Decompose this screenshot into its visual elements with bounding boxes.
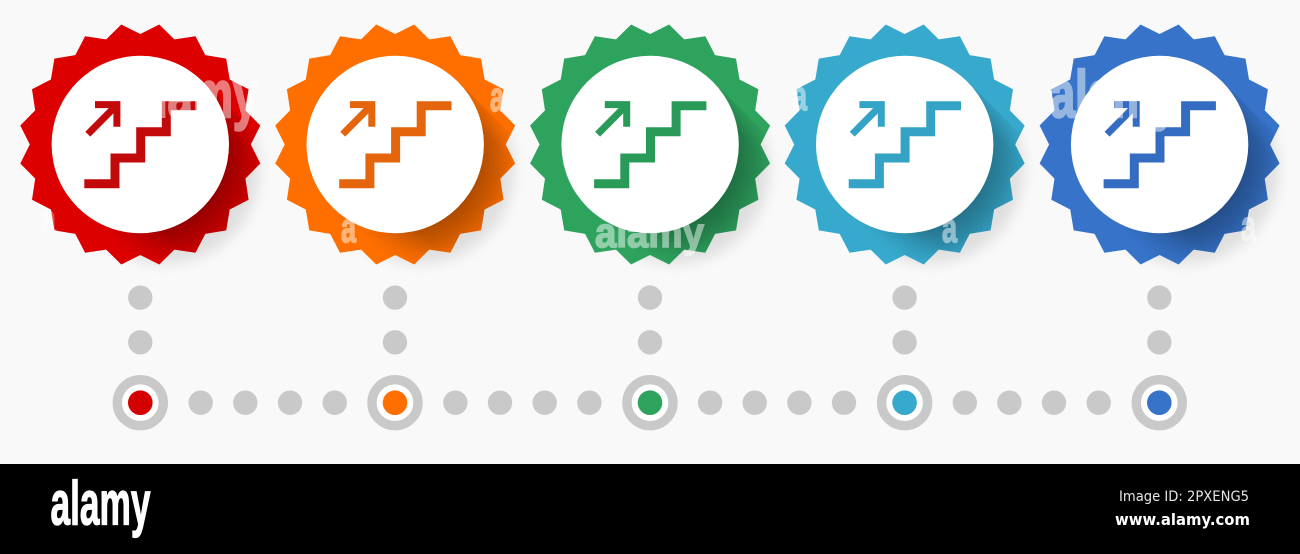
badge: red stairs (20, 24, 353, 358)
watermarks: a (1241, 202, 1256, 249)
watermarks: a (341, 204, 356, 251)
node: green (627, 380, 673, 426)
badge: orange stairs (275, 24, 608, 358)
watermarks: alamy (595, 209, 705, 256)
watermarks: a (490, 73, 504, 120)
alamy logo: alamy (50, 470, 151, 538)
watermarks: alamy (1050, 57, 1178, 131)
watermarks: a (41, 195, 56, 242)
vertical connector dots (128, 285, 1172, 354)
horizontal connector dots (188, 390, 1111, 415)
icon: red stairs with arrow (84, 105, 197, 184)
watermarks (41, 57, 1256, 256)
icon: green stairs with arrow (594, 105, 706, 184)
icon: light blue stairs with arrow (849, 105, 961, 184)
image id: Image ID: 2PXENG5 (1119, 489, 1249, 505)
watermarks: alamy (130, 57, 258, 131)
icon: blue stairs with arrow (1104, 105, 1216, 184)
node: red (117, 380, 163, 426)
node: light blue (882, 380, 928, 426)
badge: blue stairs (1040, 24, 1300, 358)
icon: orange stairs with arrow (339, 105, 452, 184)
website: www.alamy.com (1115, 510, 1250, 529)
watermarks: a (942, 204, 957, 251)
node: blue (1136, 380, 1182, 426)
watermarks: a (792, 72, 807, 119)
footer bar (0, 464, 1300, 554)
node: orange (372, 380, 418, 426)
badge: green stairs (530, 24, 863, 358)
badge: light blue stairs (785, 24, 1118, 358)
